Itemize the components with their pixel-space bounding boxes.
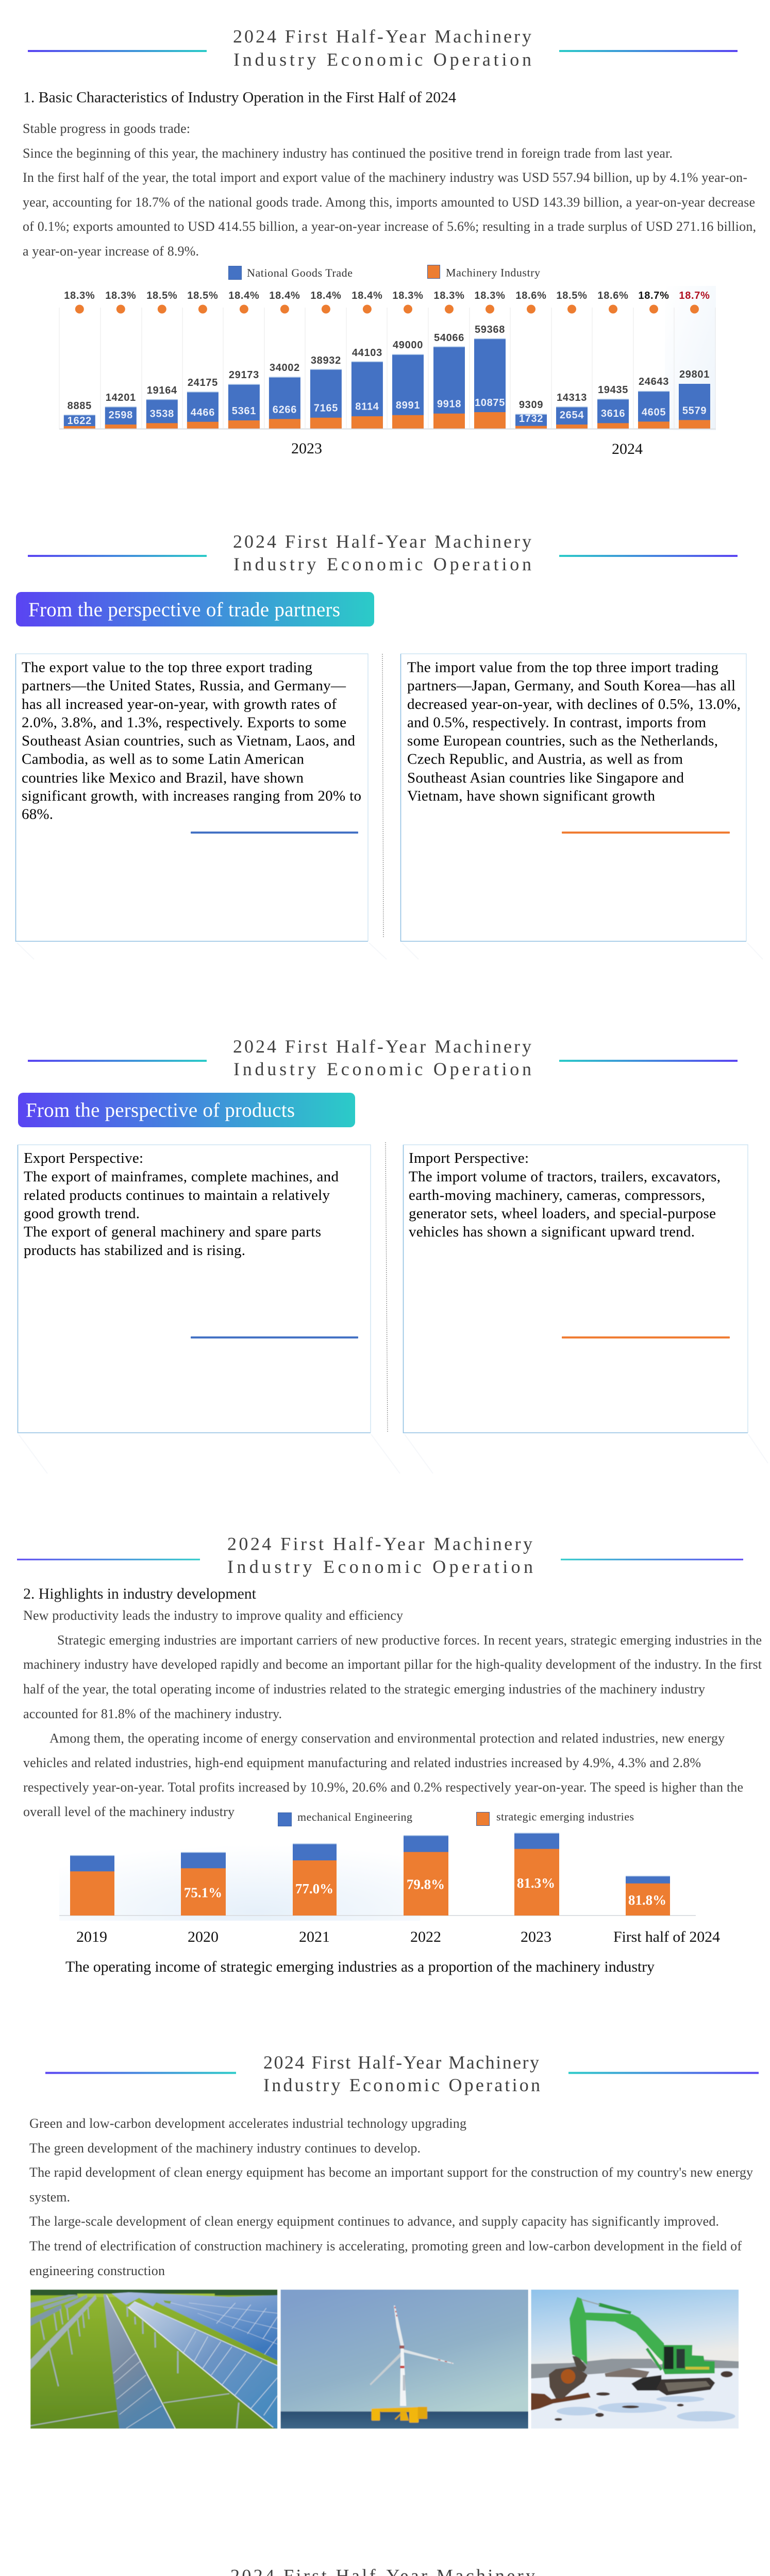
- percentage labels and dots: 18.6%: [515, 290, 547, 301]
- panel: export perspective: good growth trend.: [24, 1206, 140, 1222]
- percentage labels and dots: 18.5%: [146, 290, 177, 301]
- panel: export partners: partners—the United States, Russia, and Germany—: [22, 677, 346, 694]
- percentage labels and dots: 18.5%: [187, 290, 219, 301]
- panel: export partners: The export value to the top three export trading: [22, 659, 312, 675]
- panel: export perspective: Export Perspective:: [24, 1150, 143, 1166]
- total value labels: 54066: [434, 332, 464, 344]
- total value labels: 34002: [270, 362, 300, 374]
- orange segments: [70, 1849, 670, 1916]
- panel: import partners: Vietnam, have shown significant growth: [407, 788, 656, 804]
- machinery value labels: [68, 397, 707, 427]
- machinery value labels: 4466: [191, 407, 215, 418]
- text block: green and low-carbon: The trend of electrification of construction machinery is accelerating, promoting green and low-carbon development in the field of: [29, 2239, 742, 2253]
- share labels: 81.8%: [628, 1892, 666, 1908]
- total value labels: 24643: [639, 376, 669, 387]
- panel: export partners: has all increased year-on-year, with growth rates of: [22, 696, 337, 713]
- machinery value labels: 2654: [560, 410, 584, 421]
- year axis labels: 2023: [521, 1928, 551, 1945]
- total value labels: 49000: [393, 340, 423, 351]
- panel: import perspective: earth-moving machinery, cameras, compressors,: [409, 1187, 705, 1204]
- total value labels: 19435: [598, 384, 628, 396]
- text block: new productivity: Strategic emerging industries are important carriers of new productive forces. In recent years, strategic emerging industries in the: [57, 1633, 762, 1648]
- legend: strategic industries chart: [278, 1810, 634, 1826]
- heading: page title section 4: [17, 1534, 743, 1577]
- panel: export partners: [15, 654, 368, 941]
- heading: page title section 4: 2024 First Half-Year Machinery: [227, 1534, 532, 1554]
- total value labels: 38932: [311, 355, 341, 366]
- legend: goods trade chart: National Goods Trade: [247, 266, 353, 279]
- heading: basic characteristics: 1. Basic Characteristics of Industry Operation in the First Half of 2024: [23, 89, 456, 106]
- share labels: 79.8%: [407, 1877, 445, 1892]
- heading: page title section 1: [28, 26, 738, 70]
- legend: strategic industries chart: mechanical Engineering: [297, 1810, 412, 1823]
- divider between product panels: [386, 1142, 388, 1432]
- machinery value labels: 2598: [109, 410, 133, 421]
- bar chart: national goods trade and machinery industry 2023-2024: [59, 286, 716, 457]
- percentage labels and dots: 18.4%: [351, 290, 383, 301]
- year axis labels: First half of 2024: [613, 1928, 720, 1945]
- text block: new productivity: half of the year, the total operating income of industries related to the strategic emerging industries of the machinery industry: [23, 1682, 705, 1697]
- panel: export perspective: The export of mainframes, complete machines, and: [24, 1168, 339, 1185]
- share labels: [184, 1875, 666, 1908]
- panel: export partners: significant growth, with increases ranging from 20% to: [22, 788, 361, 804]
- year axis labels: 2020: [188, 1928, 219, 1945]
- legend: goods trade chart: Machinery Industry: [446, 266, 540, 279]
- heading: page title section 1: 2024 First Half-Year Machinery: [233, 26, 531, 47]
- total value labels: 29173: [229, 369, 259, 381]
- total value labels: 14201: [106, 392, 136, 403]
- total value labels: 14313: [557, 392, 587, 403]
- text block: green and low-carbon: The large-scale development of clean energy equipment continues to advance, and supply capacity has significantly improved.: [29, 2214, 719, 2229]
- machinery value labels: 1732: [519, 413, 543, 425]
- text block: green and low-carbon: Green and low-carbon development accelerates industrial technology upgrading: [29, 2116, 466, 2131]
- heading: page title section 4: Industry Economic Operation: [227, 1556, 533, 1577]
- percentage labels and dots: 18.4%: [228, 290, 260, 301]
- text block: green and low-carbon: The green development of the machinery industry continues to develop.: [29, 2141, 421, 2156]
- percentage labels and dots: 18.3%: [105, 290, 136, 301]
- text block: green and low-carbon: [29, 2116, 753, 2278]
- panel: export perspective: The export of general machinery and spare parts: [24, 1224, 321, 1240]
- panel: import partners: decreased year-on-year, with declines of 0.5%, 13.0%,: [407, 696, 741, 713]
- heading: page title section 5: 2024 First Half-Year Machinery: [263, 2052, 539, 2073]
- bar chart: strategic emerging industries share: [59, 1832, 720, 1945]
- divider between panels: [382, 654, 383, 938]
- text block: stable progress in goods trade: Since the beginning of this year, the machinery industry has continued the positive trend in foreign trade from last year.: [23, 146, 673, 161]
- year axis labels: [291, 440, 643, 457]
- legend: strategic industries chart: strategic emerging industries: [496, 1810, 634, 1823]
- total value labels: [68, 324, 710, 412]
- text block: new productivity: overall level of the machinery industry: [23, 1804, 235, 1819]
- percentage labels and dots: 18.3%: [392, 290, 424, 301]
- text block: stable progress in goods trade: of 0.1%; exports amounted to USD 414.55 billion, a year-on-year increase of 5.6%; resulting in a trade surplus of USD 271.16 billion,: [23, 219, 756, 234]
- text block: new productivity: vehicles and related industries, high-end equipment manufacturing and related industries increased by 4.9%, 4.3% and 2.8%: [23, 1755, 701, 1770]
- panel: import partners: Czech Republic, and Austria, as well as from: [407, 751, 683, 768]
- panel: import partners: some European countries, such as the Netherlands,: [407, 733, 718, 749]
- percentage labels and dots: 18.5%: [556, 290, 588, 301]
- panel: export perspective: products has stabilized and is rising.: [24, 1242, 245, 1259]
- year axis labels: 2022: [410, 1928, 441, 1945]
- machinery value labels: 3538: [150, 408, 174, 419]
- percentage labels and dots: 18.3%: [64, 290, 95, 301]
- panel: import perspective: generator sets, wheel loaders, and special-purpose: [409, 1206, 716, 1222]
- blue segments: [70, 1833, 670, 1916]
- chart caption: The operating income of strategic emerging industries as a proportion of the machinery industry: [65, 1958, 655, 1975]
- percentage labels and dots: [64, 290, 710, 313]
- total value labels: 29801: [679, 369, 710, 380]
- year axis labels: 2019: [76, 1928, 107, 1945]
- panel: export perspective: related products continues to maintain a relatively: [24, 1187, 330, 1204]
- percentage labels and dots: 18.4%: [269, 290, 300, 301]
- banner: products: [18, 1093, 355, 1127]
- panel: import partners: Southeast Asian countries like Singapore and: [407, 770, 684, 786]
- heading: page title section 2: Industry Economic Operation: [233, 554, 531, 574]
- share labels: 77.0%: [295, 1881, 333, 1896]
- total value labels: 8885: [68, 400, 92, 412]
- heading: page title section 3: 2024 First Half-Year Machinery: [233, 1036, 531, 1057]
- panel: import perspective: The import volume of tractors, trailers, excavators,: [409, 1168, 721, 1185]
- panel: export partners: 68%.: [22, 806, 53, 823]
- banner: trade partners: [16, 592, 374, 626]
- percentage labels and dots: 18.7%: [679, 290, 710, 301]
- machinery value labels: 5361: [232, 405, 256, 417]
- text block: green and low-carbon: The rapid development of clean energy equipment has become an important support for the construction of my country's new energy: [29, 2165, 753, 2180]
- year axis labels: 2024: [612, 440, 643, 457]
- heading: page title section 5: [45, 2052, 759, 2095]
- percentage labels and dots: 18.7%: [638, 290, 669, 301]
- share labels: 81.3%: [517, 1875, 555, 1891]
- text block: new productivity: machinery industry have developed rapidly and become an important pillar for the high-quality development of the industry. In the first: [23, 1657, 762, 1672]
- machinery value labels: 9918: [437, 398, 461, 410]
- machinery value labels: 6266: [273, 404, 297, 415]
- text block: new productivity: accounted for 81.8% of the machinery industry.: [23, 1706, 282, 1721]
- panel: import perspective: [403, 1145, 748, 1433]
- image: offshore wind turbine: [280, 2290, 528, 2429]
- orange bars: [64, 412, 710, 429]
- total value labels: 44103: [352, 347, 382, 359]
- panel: import partners: partners—Japan, Germany, and South Korea—has all: [407, 677, 735, 694]
- banner: products: From the perspective of products: [26, 1099, 295, 1122]
- year axis labels: [76, 1928, 720, 1945]
- heading: page title section 2: 2024 First Half-Year Machinery: [233, 531, 531, 552]
- heading: page title section 3: [28, 1036, 738, 1079]
- total value labels: 19164: [147, 385, 177, 396]
- legend: goods trade chart: [229, 265, 540, 279]
- panel: export partners: Southeast Asian countries, such as Vietnam, Laos, and: [22, 733, 356, 749]
- machinery value labels: 7165: [314, 403, 338, 414]
- percentage labels and dots: 18.6%: [597, 290, 629, 301]
- panel: export partners: countries like Mexico and Brazil, have shown: [22, 770, 304, 786]
- panel: export perspective: [18, 1145, 371, 1433]
- image: green excavator on snow: [531, 2290, 739, 2429]
- machinery value labels: 1622: [68, 415, 92, 427]
- heading: page title section 5: Industry Economic Operation: [263, 2075, 540, 2095]
- machinery value labels: 5579: [682, 405, 707, 416]
- percentage labels and dots: 18.3%: [433, 290, 465, 301]
- blue bars: [64, 339, 710, 429]
- heading: page title section 1: Industry Economic Operation: [233, 49, 531, 70]
- text block: new productivity: New productivity leads the industry to improve quality and efficiency: [23, 1608, 403, 1623]
- total value labels: 9309: [519, 399, 543, 411]
- text block: green and low-carbon: engineering construction: [29, 2263, 165, 2278]
- panel: import perspective: vehicles has shown a significant upward trend.: [409, 1224, 695, 1240]
- banner: trade partners: From the perspective of trade partners: [28, 599, 340, 621]
- text block: stable progress in goods trade: [23, 121, 756, 259]
- text block: new productivity: Among them, the operating income of energy conservation and environmental protection and related industries, new energy: [49, 1731, 725, 1745]
- text block: green and low-carbon: system.: [29, 2190, 70, 2205]
- year axis labels: 2023: [291, 440, 322, 457]
- machinery value labels: 8114: [355, 401, 379, 412]
- panel: export partners: Cambodia, as well as to some Latin American: [22, 751, 304, 768]
- panel: import partners: [401, 654, 746, 941]
- panel: export partners: 2.0%, 3.8%, and 1.3%, respectively. Exports to some: [22, 714, 346, 731]
- machinery value labels: 8991: [396, 400, 420, 411]
- text block: stable progress in goods trade: Stable progress in goods trade:: [23, 121, 190, 136]
- text block: stable progress in goods trade: In the first half of the year, the total import and export value of the machinery industry was USD 557.94 billion, up by 4.1% year-on-: [23, 170, 747, 185]
- text block: new productivity: respectively year-on-year. Total profits increased by 10.9%, 20.6% and 0.2% respectively year-on-year. The speed is higher than the: [23, 1780, 743, 1795]
- text block: new productivity: [23, 1608, 762, 1819]
- text block: stable progress in goods trade: a year-on-year increase of 8.9%.: [23, 244, 199, 259]
- panel: import partners: and 0.5%, respectively. In contrast, imports from: [407, 714, 706, 731]
- machinery value labels: 10875: [475, 397, 505, 409]
- panel: import partners: The import value from the top three import trading: [407, 659, 718, 675]
- total value labels: 24175: [188, 377, 218, 388]
- heading: highlights: 2. Highlights in industry development: [23, 1585, 257, 1602]
- panel: import perspective: Import Perspective:: [409, 1150, 529, 1166]
- machinery value labels: 4605: [642, 406, 666, 418]
- image: solar panel field: [30, 2290, 277, 2429]
- heading: page title section 3: Industry Economic Operation: [233, 1059, 531, 1079]
- machinery value labels: 3616: [601, 408, 625, 419]
- total value labels: 59368: [475, 324, 505, 335]
- text block: stable progress in goods trade: year, accounting for 18.7% of the national goods trade. Among this, imports amounted to USD 143.39 billion, a year-on-year decrease: [23, 195, 755, 210]
- heading: page title section 2: [28, 531, 738, 574]
- year axis labels: 2021: [299, 1928, 330, 1945]
- percentage labels and dots: 18.3%: [474, 290, 506, 301]
- percentage labels and dots: 18.4%: [310, 290, 342, 301]
- share labels: 75.1%: [184, 1885, 222, 1901]
